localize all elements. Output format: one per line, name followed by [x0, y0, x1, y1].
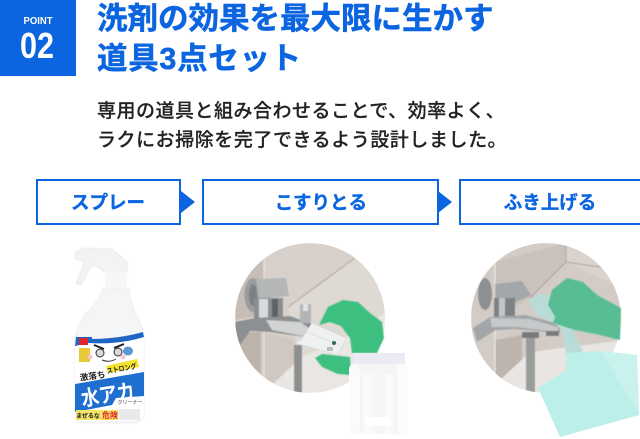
bottle label: クリーナー — [117, 400, 143, 406]
step label: spray: スプレー — [71, 192, 145, 213]
bottle label — [75, 331, 144, 421]
photo: scrubbing faucet — [235, 240, 408, 434]
bottle label: 危険 — [102, 410, 118, 420]
bottle label: まぜるな — [76, 412, 100, 420]
step label: scrub — [203, 180, 438, 224]
title: 道具3点セット — [97, 42, 302, 76]
point badge: 02 — [20, 25, 54, 66]
icon: white scrubbing pad — [349, 353, 408, 434]
green glove — [315, 300, 384, 375]
step label: wipe — [460, 180, 640, 224]
point badge: POINT — [24, 15, 53, 27]
bottle label: 激落ち — [79, 369, 106, 383]
title — [97, 2, 494, 76]
wiping cloth in hand — [528, 294, 583, 354]
step label: wipe: ふき上げる — [504, 192, 596, 213]
icon: blue microfiber cloth — [538, 351, 639, 437]
bottle label: 水アカ — [80, 380, 136, 411]
photo: wiping faucet — [471, 243, 639, 437]
description text: ラクにお掃除を完了できるよう設計しました。 — [97, 129, 507, 151]
step label: scrub: こすりとる — [275, 192, 367, 213]
arrow: spray to scrub — [181, 191, 195, 213]
description text: 専用の道具と組み合わせることで、効率よく、 — [97, 100, 505, 122]
arrow: scrub to wipe — [438, 191, 452, 213]
title: 洗剤の効果を最大限に生かす — [97, 2, 494, 36]
scrubbing sponge in hand — [295, 323, 346, 355]
step label: spray — [37, 180, 180, 224]
bottle label: ストロング — [106, 362, 137, 376]
green glove — [548, 278, 621, 340]
description text — [97, 100, 507, 151]
point badge — [0, 0, 76, 76]
spray bottle — [75, 248, 144, 423]
